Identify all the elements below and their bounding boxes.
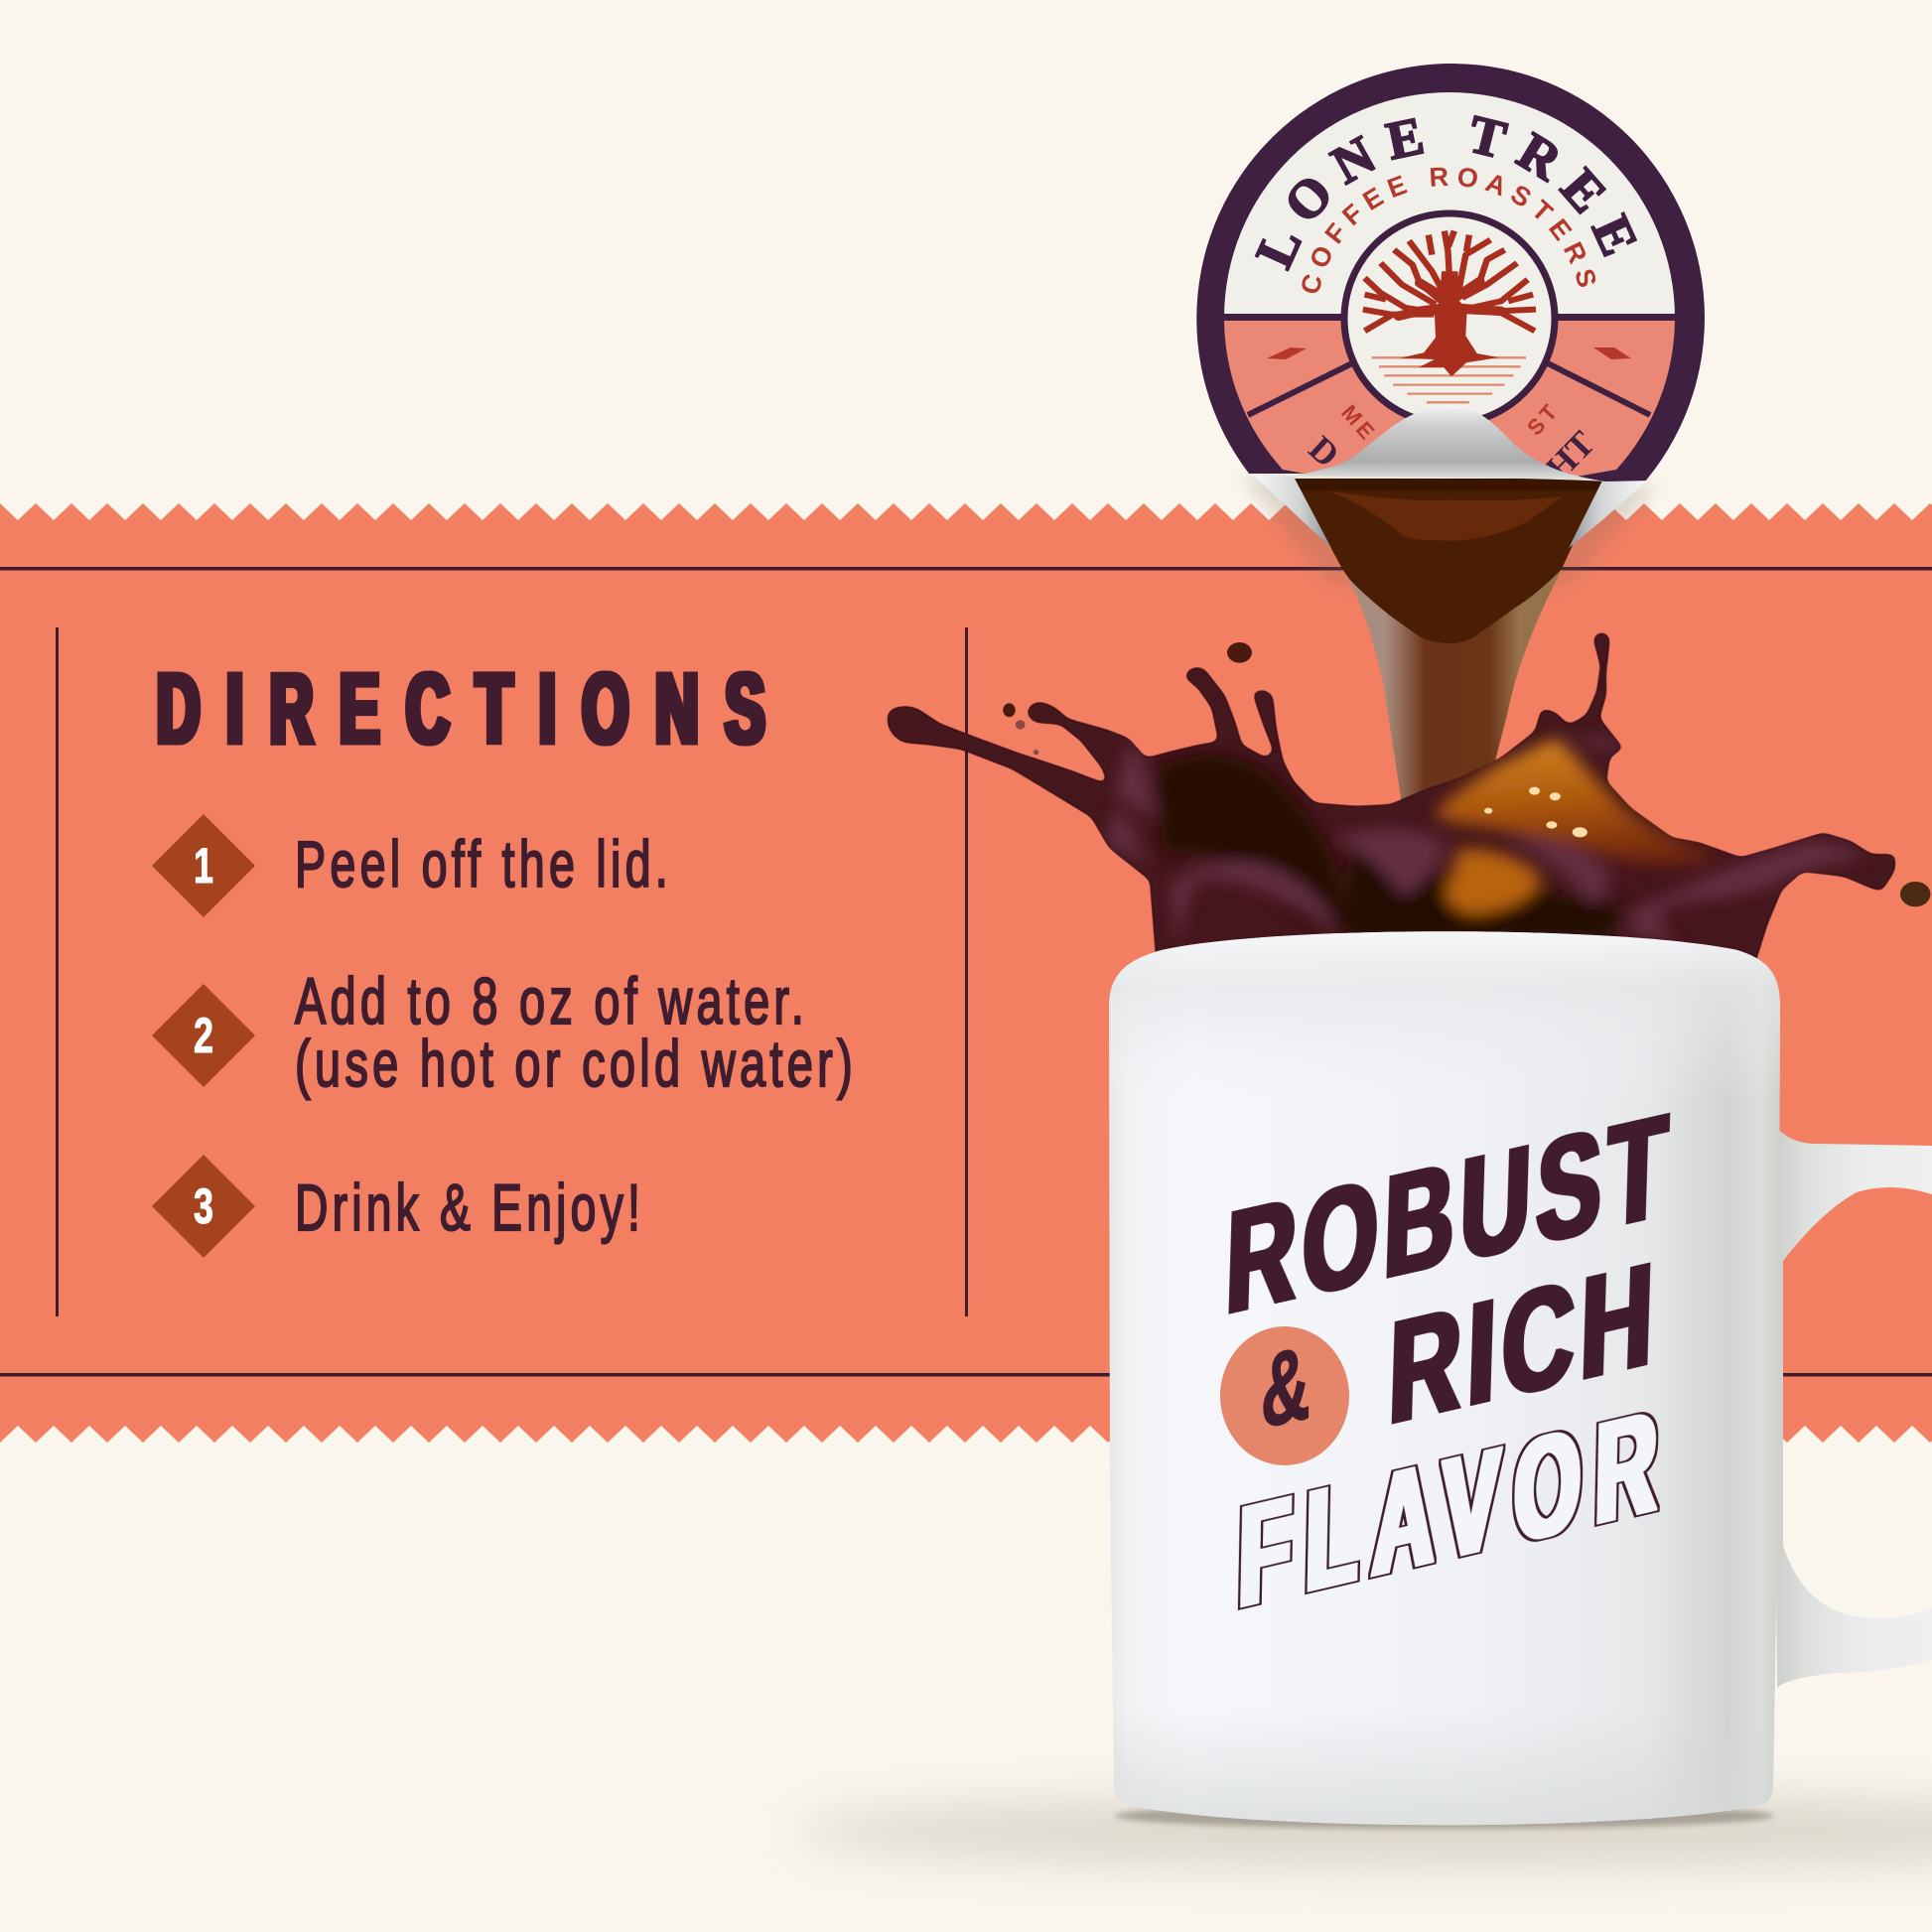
step 2: (use hot or cold water) [295, 1027, 857, 1100]
step 3: 3 [194, 1179, 213, 1234]
step 3: Drink & Enjoy! [295, 1171, 644, 1244]
mug badge: ampersand [1220, 1324, 1349, 1465]
lid roast fragments [1307, 403, 1592, 475]
step 2: Add to 8 oz of water. [295, 964, 808, 1037]
lid lower panel [1224, 318, 1675, 482]
lid tree medallion [1344, 213, 1555, 424]
lid upper panel [1224, 92, 1675, 318]
splash: droplets [1003, 642, 1930, 906]
splash: highlights [1484, 787, 1587, 837]
lid side flaps [1253, 475, 1646, 548]
step 2 [152, 964, 857, 1100]
lid ring [1196, 64, 1705, 482]
heading: directions: DIRECTIONS [157, 653, 791, 764]
lid peel flap [1294, 405, 1605, 482]
coffee lid [1196, 64, 1705, 482]
peel flap shadow [1241, 477, 1658, 586]
coffee splash [887, 631, 1930, 966]
lid diamonds [1267, 347, 1631, 359]
lid dividers [1248, 363, 1650, 415]
mug shadow [794, 1796, 1932, 1867]
step 2: 2 [194, 1009, 213, 1063]
coffee stream [1294, 479, 1603, 804]
mug text: rich: RICH [1387, 1231, 1662, 1455]
lid roast fragments: D [1302, 428, 1347, 475]
tree logo [1363, 231, 1536, 402]
lid roast fragments: HT [1538, 423, 1602, 488]
mug body [1109, 931, 1780, 1825]
step 3 [152, 1155, 644, 1258]
brand: coffee roasters: COFFEE ROASTERS [1302, 167, 1596, 294]
step 1: Peel off the lid. [295, 827, 672, 900]
panel: directions band [0, 503, 1932, 1443]
lid roast fragments: ME [1336, 400, 1382, 447]
lid roast fragments: ST [1522, 397, 1565, 440]
mug handle [1772, 1122, 1932, 1688]
mug [1109, 931, 1932, 1825]
step 1: 1 [194, 839, 213, 894]
mug badge: ampersand: & [1261, 1324, 1311, 1449]
brand: lone tree: LONE TREE [1255, 115, 1638, 272]
step 1 [152, 814, 672, 917]
splash: shaded detail [1108, 728, 1864, 946]
mug text: robust: ROBUST [1224, 1082, 1676, 1345]
